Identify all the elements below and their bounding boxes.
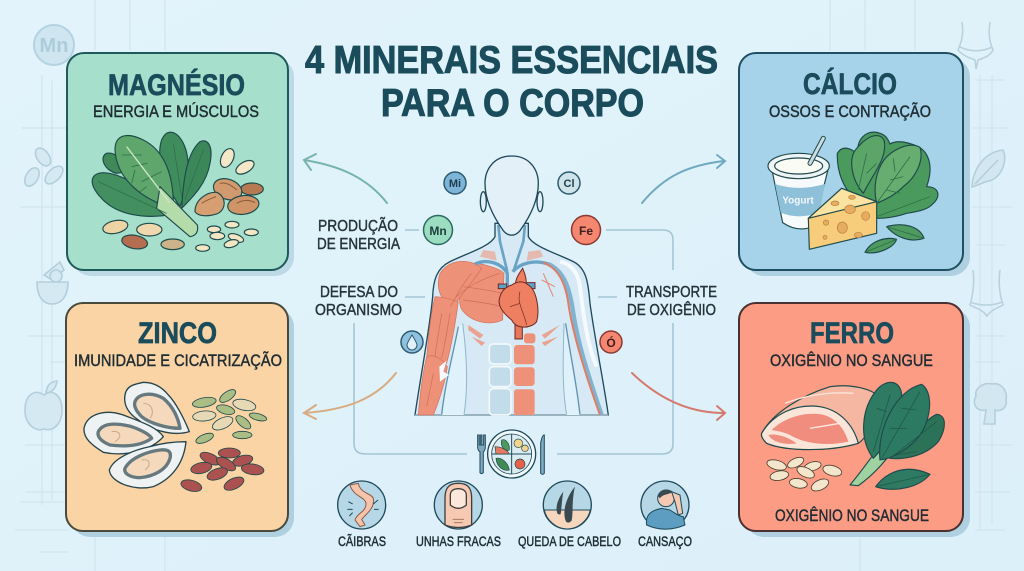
heading: ferro: FERRO (810, 317, 894, 350)
label: transporte de oxigênio: TRANSPORTE (626, 284, 717, 301)
background icon: apple (25, 381, 62, 430)
label: transporte de oxigênio (626, 284, 717, 319)
label: produção de energia: DE ENERGIA (317, 236, 400, 253)
background icon: torso waist top (958, 22, 993, 69)
label: defesa do organismo: ORGANISMO (315, 302, 402, 319)
label: transporte de oxigênio: DE OXIGÊNIO (627, 300, 716, 319)
caption: oxigênio no sangue: OXIGÊNIO NO SANGUE (775, 506, 929, 525)
background icon: broccoli (974, 384, 1006, 424)
label: defesa do organismo (315, 284, 402, 319)
panel: zinco (66, 303, 294, 537)
illustration: oysters, seeds, beans (84, 382, 268, 494)
panel: cálcio (739, 53, 970, 276)
subheading: ossos e contração: OSSOS E CONTRAÇÃO (769, 102, 931, 121)
icon: cansaço (641, 481, 689, 529)
illustration: yogurt, cheese, greens: Yogurt (782, 195, 814, 206)
arrow: to cálcio (642, 155, 725, 203)
subheading: energia e músculos: ENERGIA E MÚSCULOS (93, 102, 259, 121)
arrow: to magnésio (304, 154, 387, 203)
illustration: spinach and nuts (92, 132, 263, 251)
heading: cálcio: CÁLCIO (803, 67, 897, 101)
background icon: fruit bowl (37, 262, 68, 304)
arm and chest muscles (418, 250, 560, 415)
background icon: torso waist bottom (970, 270, 1003, 316)
mineral badge: Cl: Cl (564, 178, 574, 190)
background icon: Mn mineral bubble: Mn (40, 35, 68, 57)
connector frame (354, 230, 673, 454)
label: defesa do organismo: DEFESA DO (320, 284, 398, 301)
head (480, 156, 543, 235)
background icon: leaf (972, 150, 1005, 187)
subheading: imunidade e cicatrização: IMUNIDADE E CICATRIZAÇÃO (74, 351, 282, 370)
background icon: Mn mineral bubble (34, 25, 74, 65)
arrow: to ferro (632, 373, 725, 420)
symptom label: unhas fracas: UNHAS FRACAS (416, 533, 501, 549)
icon: cãibras (338, 481, 386, 529)
mineral badge: water drop (401, 331, 423, 353)
mineral badge: Ó: Ó (606, 335, 616, 350)
mineral badge: Fe: Fe (579, 224, 593, 238)
mineral badge: Mn (424, 216, 452, 244)
symptom label: queda de cabelo: QUEDA DE CABELO (518, 533, 621, 549)
mineral badge: Ó (600, 331, 622, 353)
label: produção de energia: PRODUÇÃO (318, 215, 398, 235)
central body figure (415, 156, 608, 415)
plate with cutlery (478, 430, 544, 478)
heading: zinco: ZINCO (138, 317, 217, 350)
mineral badge: Cl (558, 172, 580, 194)
mineral badge: Mi (444, 172, 466, 194)
blood vessels (475, 225, 602, 415)
label: produção de energia (317, 215, 400, 253)
subheading: oxigênio no sangue: OXIGÊNIO NO SANGUE (770, 351, 933, 370)
icon: unhas fracas (434, 481, 482, 529)
symptom label: cansaço: CANSAÇO (638, 533, 692, 549)
illustration: meat, beans, spinach (761, 382, 944, 493)
title: PARA O CORPO (381, 82, 644, 125)
mineral badge: Fe (572, 216, 600, 244)
abdominal muscles (489, 344, 511, 415)
background icon: seeds (22, 145, 66, 189)
title (305, 39, 718, 125)
mineral badge: Mn: Mn (429, 224, 447, 238)
heading: magnésio: MAGNÉSIO (108, 68, 245, 102)
illustration: yogurt, cheese, greens (768, 132, 938, 253)
panel: magnésio (67, 53, 294, 276)
heart (498, 268, 538, 339)
icon: queda de cabelo (543, 481, 591, 529)
symptom label: cãibras: CÃIBRAS (338, 533, 386, 549)
panel: ferro (739, 303, 970, 537)
mineral badge: Mi: Mi (449, 178, 461, 190)
title: 4 MINERAIS ESSENCIAIS (305, 39, 718, 82)
arrow: to zinco (304, 373, 396, 419)
